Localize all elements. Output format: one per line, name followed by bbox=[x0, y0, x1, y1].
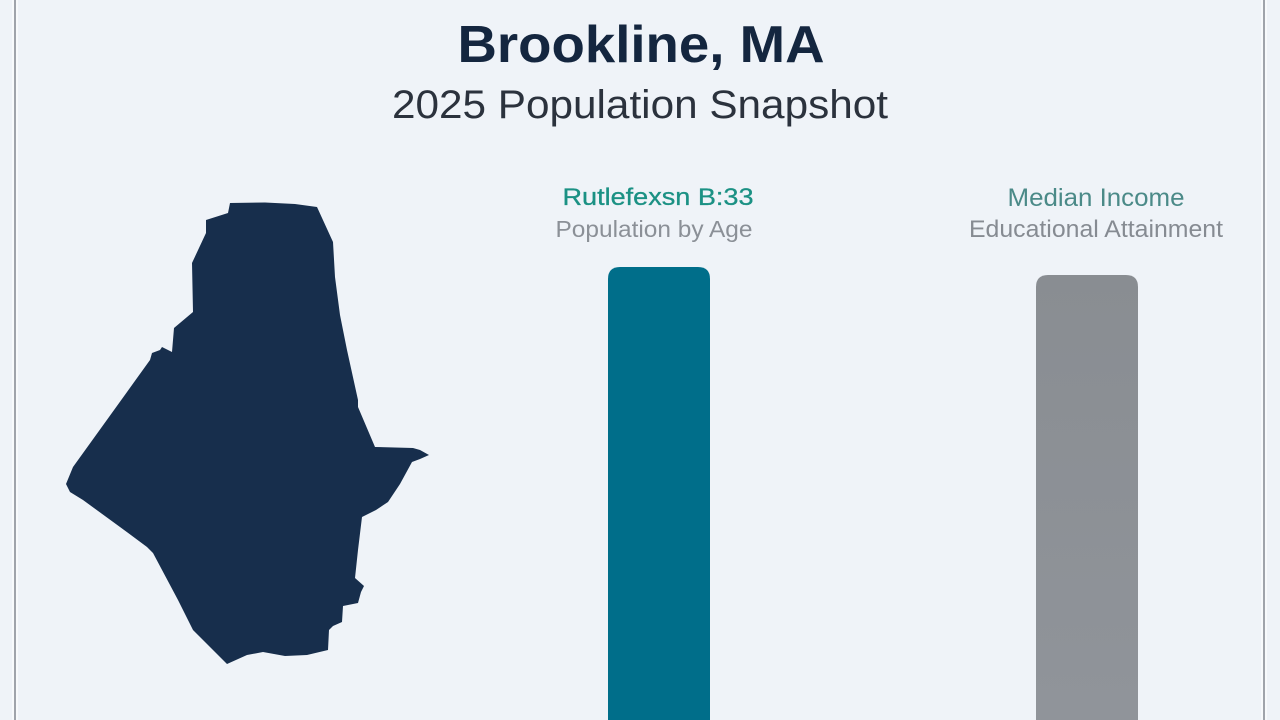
bar: population by age bbox=[608, 267, 710, 720]
stat label: educational attainment: Educational Attainment bbox=[969, 216, 1223, 243]
title: Brookline, MA bbox=[458, 16, 824, 74]
stat column: population bbox=[556, 184, 754, 720]
stat heading: median income: Median Income bbox=[1008, 184, 1184, 212]
map: Brookline town silhouette bbox=[66, 202, 429, 664]
subtitle: 2025 Population Snapshot bbox=[392, 83, 888, 127]
stat heading: population value: Rutlefexsn B:33 bbox=[562, 184, 754, 211]
bar: educational attainment bbox=[1036, 275, 1138, 720]
stat column: income and education bbox=[969, 184, 1223, 720]
stat label: population by age: Population by Age bbox=[556, 216, 752, 242]
